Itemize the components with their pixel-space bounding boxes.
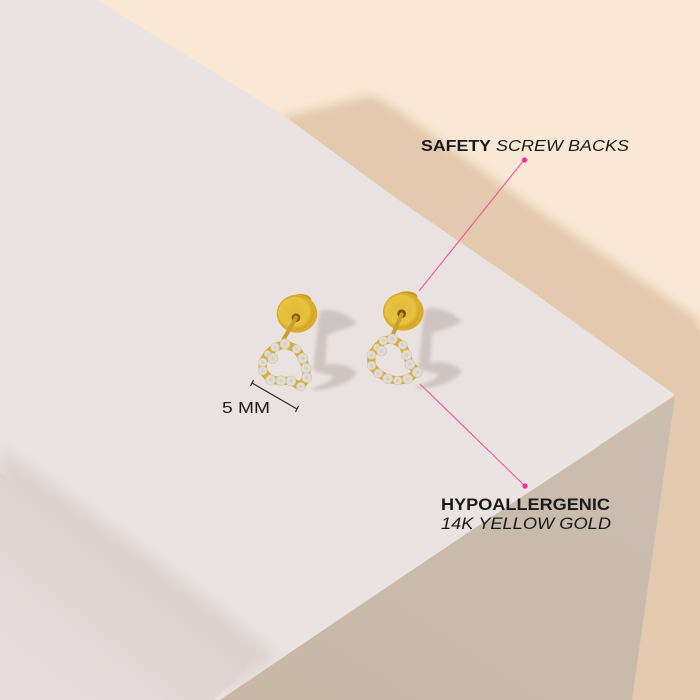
leader line — [420, 384, 525, 486]
left earring — [258, 294, 317, 391]
post — [283, 318, 296, 340]
heart frame — [371, 339, 417, 381]
block: right face — [220, 396, 675, 700]
leader line — [419, 160, 524, 291]
post — [393, 314, 402, 335]
screw back — [277, 294, 317, 333]
callout: safety screw backs — [419, 138, 629, 291]
heart frame — [263, 344, 307, 387]
size label: 5 MM — [222, 400, 270, 417]
leader dot — [522, 157, 527, 163]
heart gems — [258, 339, 312, 391]
screw back — [383, 291, 424, 331]
size measure: 5 mm — [222, 380, 298, 417]
callout subheading: SCREW BACKS — [496, 138, 629, 155]
heart gems — [367, 334, 423, 385]
dimension line — [250, 380, 298, 412]
block: left face — [0, 447, 275, 700]
callout heading: HYPOALLERGENIC — [441, 495, 610, 514]
callout subheading: 14K YELLOW GOLD — [441, 514, 611, 533]
earring shadows — [310, 308, 462, 390]
cast shadow on wall — [278, 95, 700, 700]
callout heading: SAFETY — [421, 138, 491, 155]
leader dot — [522, 483, 528, 489]
callout: hypoallergenic gold — [420, 384, 611, 533]
right earring — [367, 291, 424, 385]
